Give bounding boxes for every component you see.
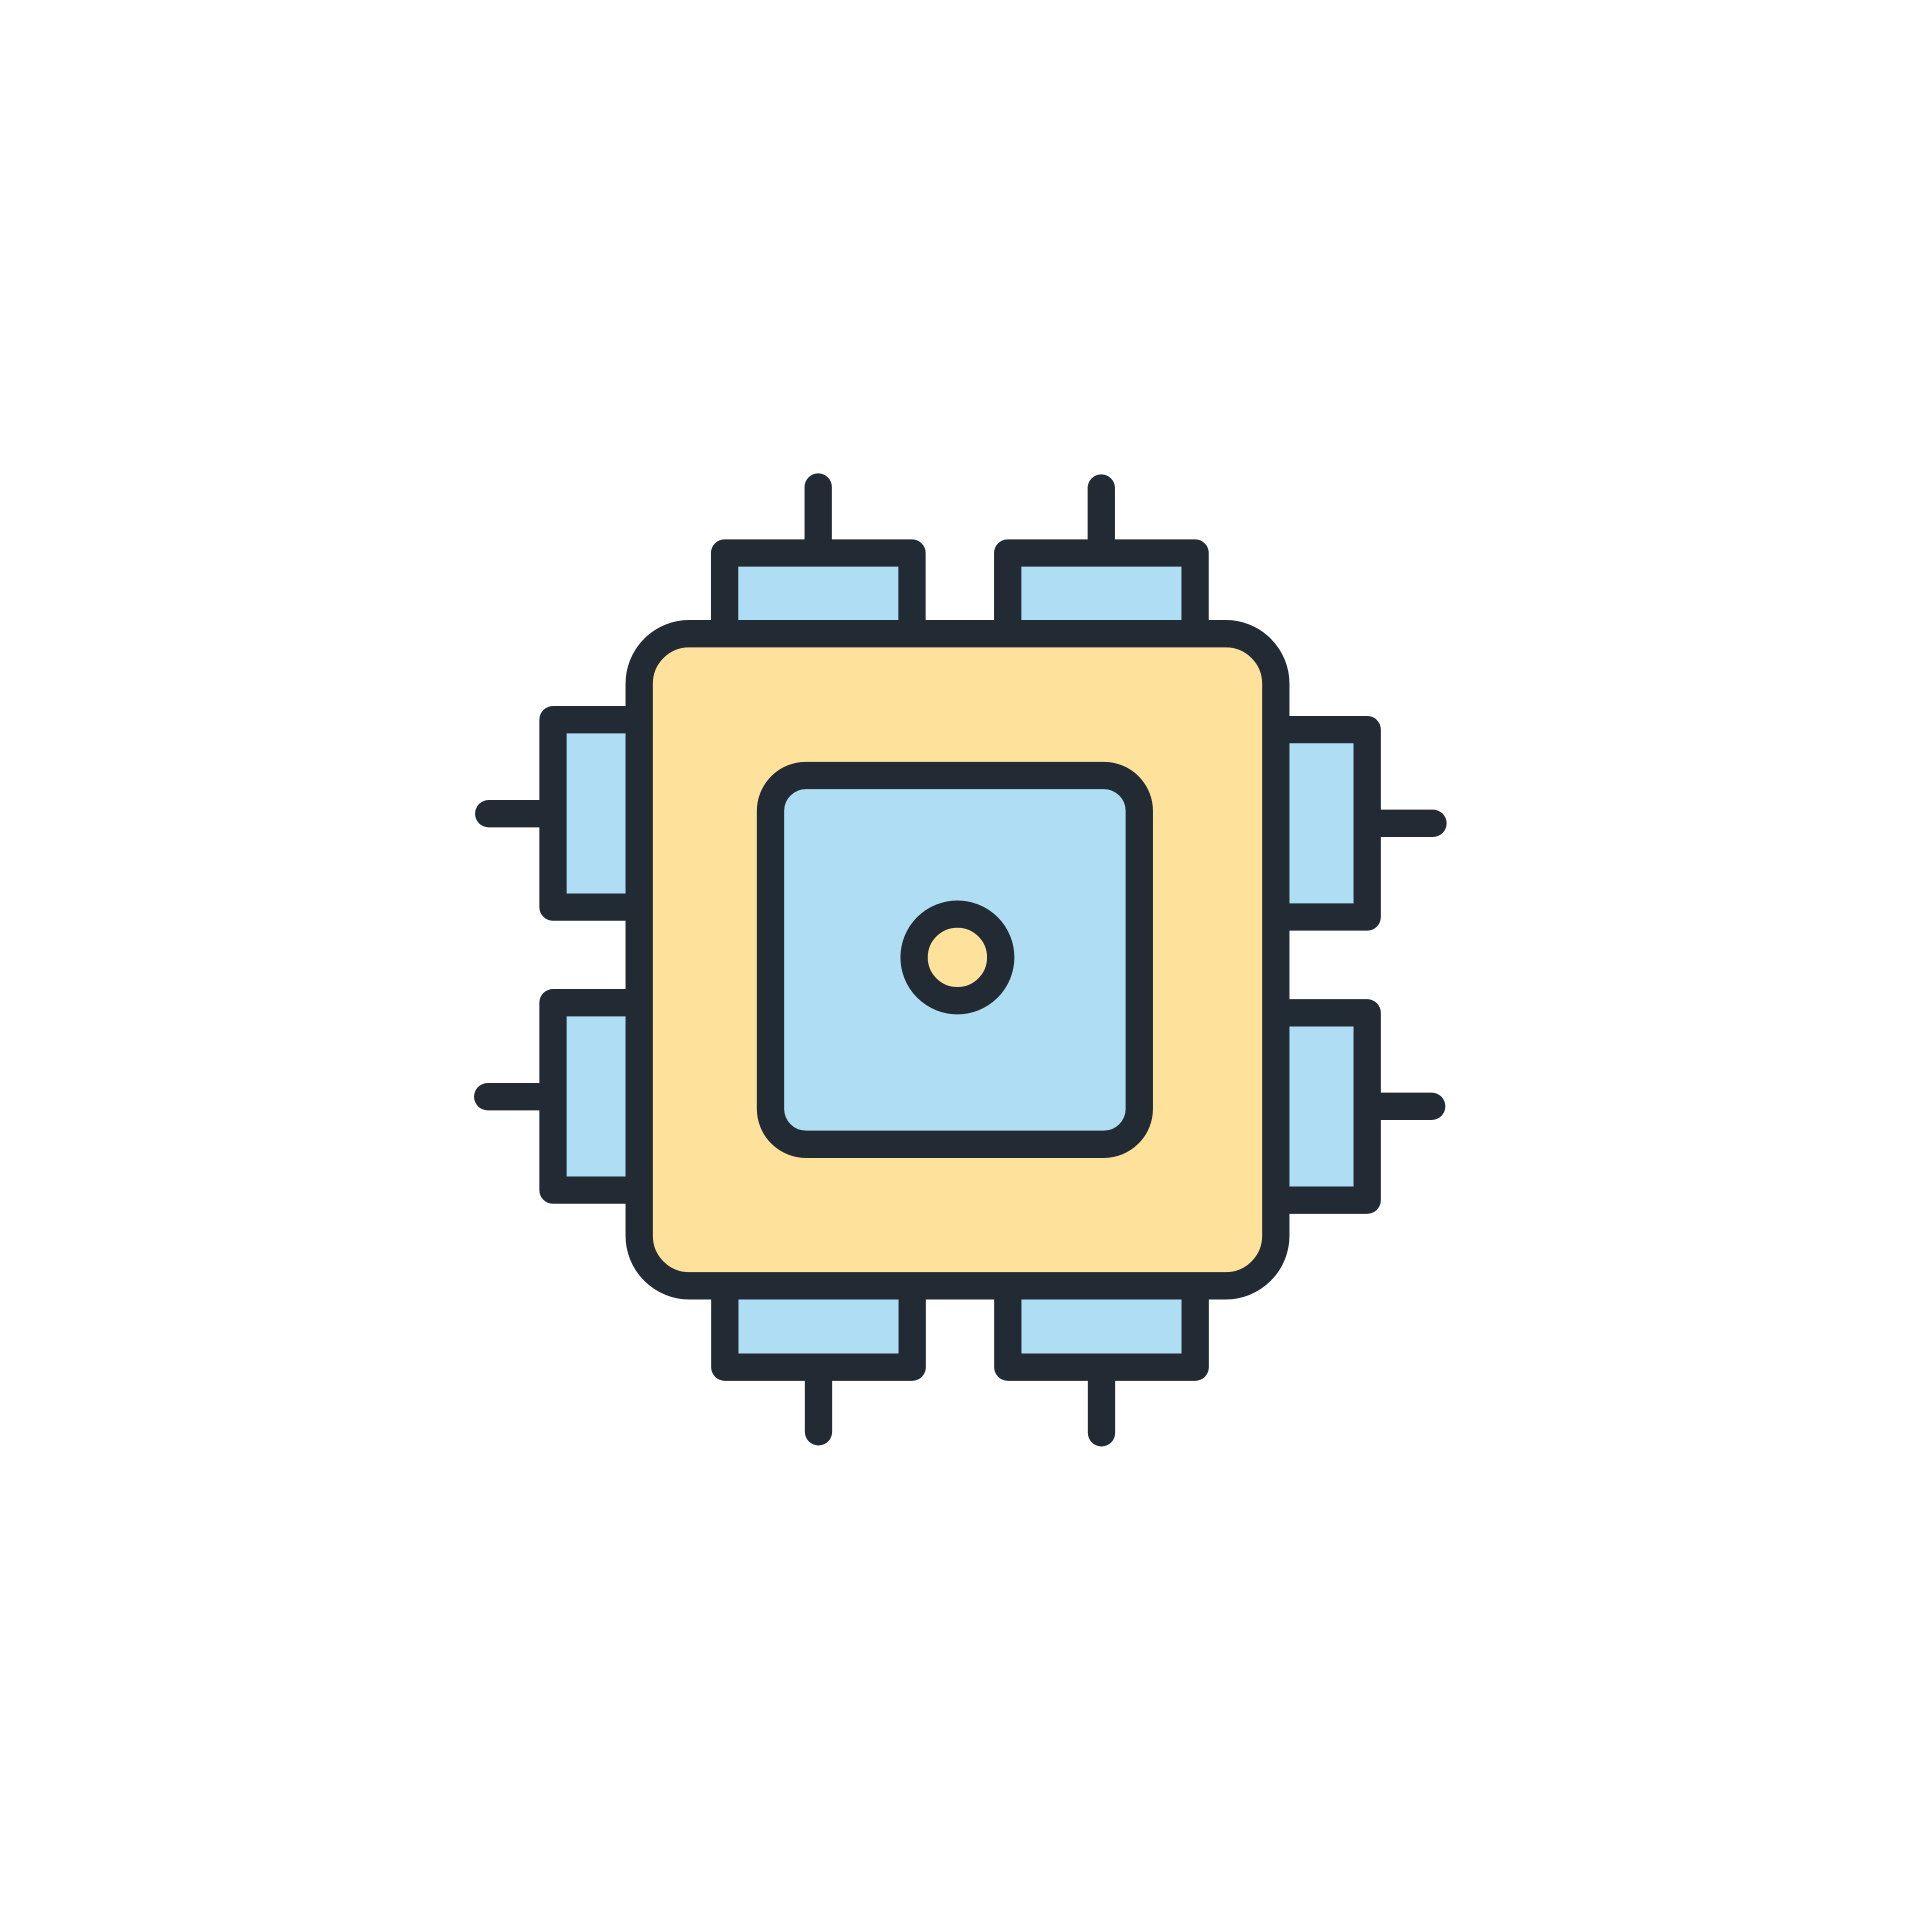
chip body <box>639 634 1276 1286</box>
top right connector pad and pin <box>1008 488 1195 653</box>
right lower connector pad and pin <box>1267 1013 1432 1200</box>
bottom left connector pad and pin <box>725 1267 912 1432</box>
inner processor die <box>770 776 1139 1144</box>
right upper connector pad and pin <box>1267 730 1433 917</box>
left upper connector pad and pin <box>489 720 653 907</box>
center circle <box>914 914 1001 1001</box>
bottom right connector pad and pin <box>1008 1267 1195 1433</box>
top left connector pad and pin <box>725 487 912 653</box>
left lower connector pad and pin <box>488 1003 653 1190</box>
